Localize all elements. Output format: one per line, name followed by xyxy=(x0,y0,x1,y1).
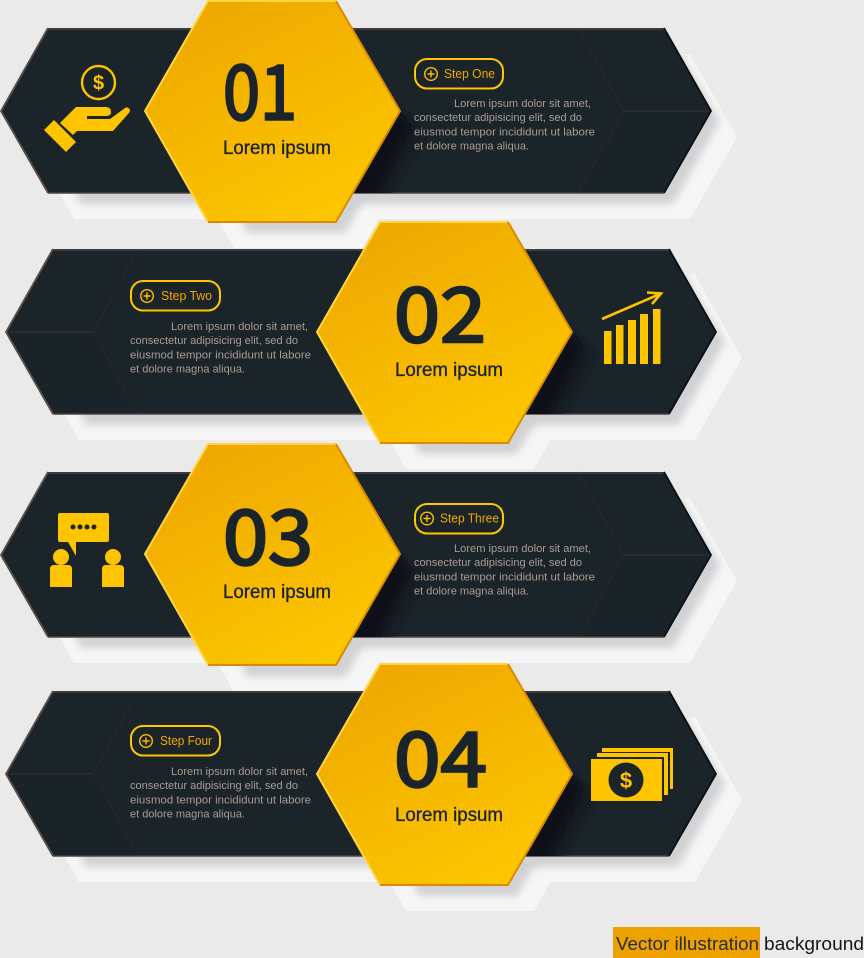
step 4 hexagon xyxy=(317,664,572,885)
step three pill xyxy=(415,504,503,534)
step three body text: eiusmod tempor incididunt ut labore xyxy=(414,572,595,584)
step four pill: Step Four xyxy=(160,734,212,748)
step two body text: eiusmod tempor incididunt ut labore xyxy=(130,350,311,362)
step 1 hexagon xyxy=(145,1,400,222)
step 2 hexagon xyxy=(317,222,572,443)
step three body text: consectetur adipisicing elit, sed do xyxy=(414,557,582,569)
step one body text: Lorem ipsum dolor sit amet, xyxy=(454,98,591,110)
step four body text: et dolore magna aliqua. xyxy=(130,808,245,820)
step one body text: eiusmod tempor incididunt ut labore xyxy=(414,126,595,138)
step 2 dark band xyxy=(5,248,717,415)
icon: hand holding coin xyxy=(44,66,130,152)
step three body text: et dolore magna aliqua. xyxy=(414,586,529,598)
hexagon label 2: Lorem ipsum xyxy=(395,360,503,381)
step 1 dark band xyxy=(0,28,712,194)
step 2 drop shadow xyxy=(65,248,742,469)
step one pill xyxy=(415,59,503,88)
step four body text xyxy=(130,766,311,820)
step 1 row xyxy=(1,1,737,248)
footer caption: Vector illustration xyxy=(616,933,759,954)
step four body text: Lorem ipsum dolor sit amet, xyxy=(171,766,308,778)
icon: two people talking xyxy=(50,513,124,587)
step two body text: consectetur adipisicing elit, sed do xyxy=(130,335,298,347)
step 3 row xyxy=(1,444,737,692)
step one body text: consectetur adipisicing elit, sed do xyxy=(414,112,582,124)
step 3 hexagon xyxy=(145,444,400,665)
step three body text: Lorem ipsum dolor sit amet, xyxy=(454,543,591,555)
hexagon label 4: Lorem ipsum xyxy=(395,805,503,826)
step 3 drop shadow xyxy=(60,471,736,691)
number 04: 04 xyxy=(394,698,487,808)
step two body text: et dolore magna aliqua. xyxy=(130,364,245,376)
step two pill: Step Two xyxy=(161,289,212,303)
step one body text xyxy=(414,98,595,152)
footer caption xyxy=(613,927,864,958)
step three pill: Step Three xyxy=(440,512,499,526)
step two body text xyxy=(130,321,311,376)
step 1 drop shadow xyxy=(60,27,736,248)
number 02: 02 xyxy=(394,254,486,364)
number 01: 01 xyxy=(223,32,297,142)
step 4 row xyxy=(6,664,742,911)
step 4 dark band xyxy=(5,690,717,857)
icon: stack of banknotes xyxy=(591,748,673,801)
number 03: 03 xyxy=(223,476,313,586)
step one body text: et dolore magna aliqua. xyxy=(414,140,529,152)
icon: rising bar chart xyxy=(602,292,661,364)
step two body text: Lorem ipsum dolor sit amet, xyxy=(171,321,308,333)
icon: hand holding coin: $ xyxy=(93,72,104,94)
step four body text: eiusmod tempor incididunt ut labore xyxy=(130,794,311,806)
step 3 dark band xyxy=(0,472,712,638)
hexagon label 1: Lorem ipsum xyxy=(223,138,331,159)
icon: stack of banknotes: $ xyxy=(620,768,632,793)
step 2 row xyxy=(6,222,742,469)
step one pill: Step One xyxy=(444,67,495,81)
hexagon label 3: Lorem ipsum xyxy=(223,582,331,603)
step two pill xyxy=(131,281,220,310)
step four body text: consectetur adipisicing elit, sed do xyxy=(130,780,298,792)
step 4 drop shadow xyxy=(65,690,742,911)
step three body text xyxy=(414,543,595,598)
step four pill xyxy=(131,726,220,756)
footer caption: background xyxy=(764,933,864,954)
